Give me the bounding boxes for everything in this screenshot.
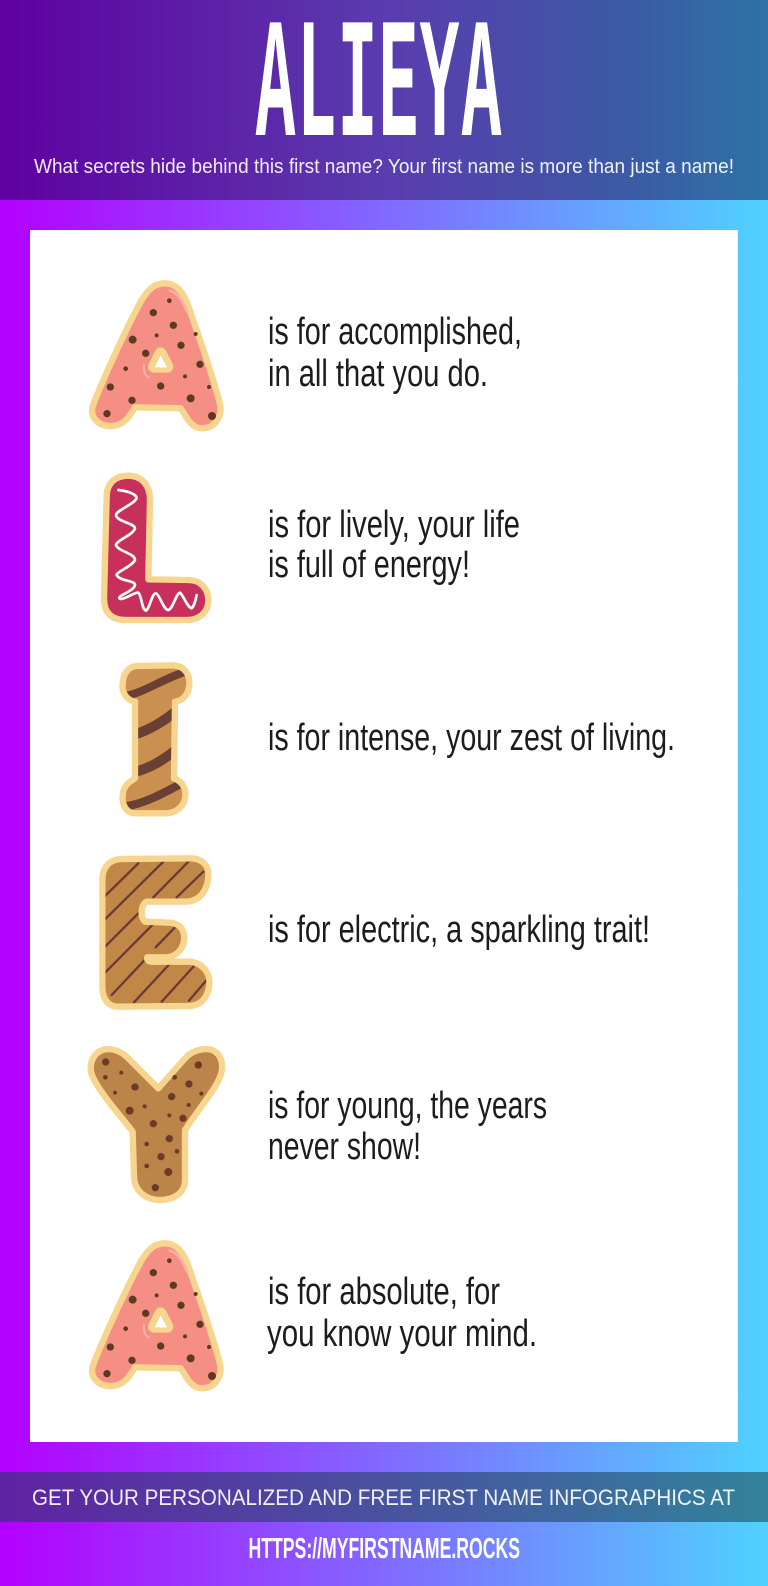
icon: cookie letter I: [123, 665, 189, 813]
text: L line: is full of energy!: [268, 544, 470, 586]
subtitle: What secrets hide behind this first name? Your first name is more than just a name!: [34, 155, 734, 178]
text: A line: is for accomplished,: [268, 311, 522, 353]
text: second A line: is for absolute, for: [268, 1271, 500, 1313]
footer call to action: GET YOUR PERSONALIZED AND FREE FIRST NAME INFOGRAPHICS AT: [32, 1485, 735, 1510]
footer band: [0, 1472, 768, 1522]
text: Y line: [268, 1085, 547, 1168]
icon: cookie letter L: [104, 476, 208, 620]
text: Y line: never show!: [268, 1126, 421, 1168]
footer URL: HTTPS://MYFIRSTNAME.ROCKS: [248, 1533, 520, 1565]
text: second A line: [267, 1271, 537, 1355]
icon: cookie letter Y: [91, 1049, 222, 1200]
text: E line: is for electric, a sparkling trait!: [268, 909, 650, 951]
header banner: [0, 0, 768, 200]
icon: cookie letter A: [92, 283, 221, 428]
icon: cookie letter E: [102, 858, 209, 1007]
text: A line: [268, 311, 522, 395]
text: L line: [268, 504, 520, 586]
text: Y line: is for young, the years: [268, 1085, 547, 1127]
icon: cookie letter A (second): [92, 1243, 221, 1388]
text: L line: is for lively, your life: [268, 504, 520, 546]
panel: white content card: [30, 230, 738, 1442]
text: second A line: you know your mind.: [267, 1313, 537, 1355]
text: A line: in all that you do.: [268, 353, 488, 395]
